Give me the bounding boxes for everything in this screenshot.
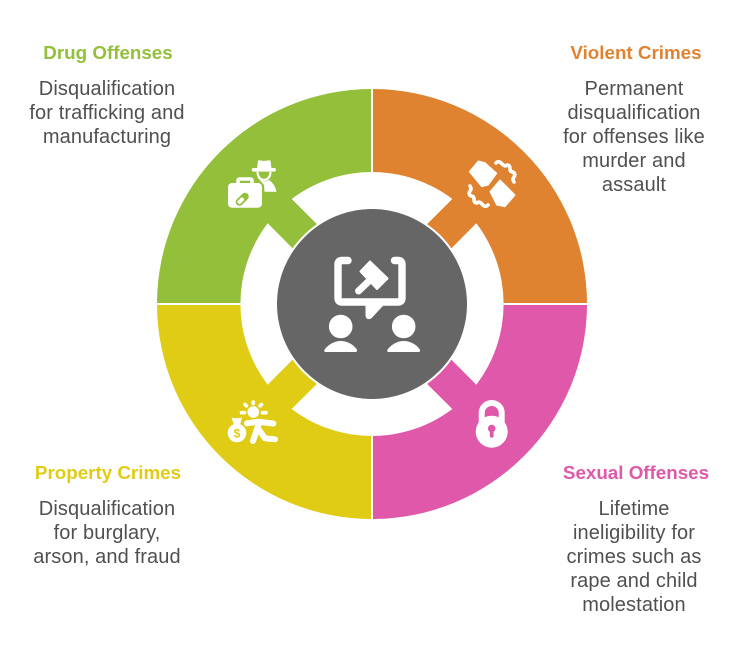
segment: sexual offenses [373,305,587,519]
icon: thief running with money bag [228,402,275,442]
description: sexual offenses: molestation [582,594,686,616]
segment: drug offenses [157,89,371,303]
segment: property crimes [157,305,371,519]
description: drug offenses: Disqualification [39,78,175,100]
icon: thief running with money bag: $ [234,426,241,440]
description: property crimes: arson, and fraud [33,546,181,568]
text block: violent crimes [563,42,705,196]
icon: padlock [476,403,508,448]
description: sexual offenses: rape and child [570,570,698,592]
inner white ring cut-outs [240,172,504,436]
description: property crimes: Disqualification [39,498,175,520]
segment: violent crimes [373,89,587,303]
description: property crimes: for burglary, [54,522,160,544]
heading: drug offenses: Drug Offenses [43,42,173,63]
icon: broken handcuffs [469,161,515,207]
description: violent crimes: Permanent [585,78,684,100]
description: sexual offenses: ineligibility for [573,522,695,544]
text block: property crimes [33,462,181,568]
description: sexual offenses: Lifetime [598,498,670,520]
heading: violent crimes: Violent Crimes [570,42,702,63]
description: violent crimes: assault [602,174,666,196]
icon: gavel, speech bubble and two people [324,260,420,352]
description: violent crimes: murder and [582,150,686,172]
description: violent crimes: for offenses like [563,126,705,148]
text block: drug offenses [29,42,185,148]
center circle [277,209,467,399]
wheel diagram [157,89,587,519]
description: violent crimes: disqualification [567,102,701,124]
heading: property crimes: Property Crimes [35,462,181,483]
description: sexual offenses: crimes such as [566,546,702,568]
description: drug offenses: for trafficking and [29,102,185,124]
heading: sexual offenses: Sexual Offenses [563,462,709,483]
text block: sexual offenses [563,462,709,616]
icon: suitcase with pill and man in hat [228,160,276,208]
description: drug offenses: manufacturing [43,126,171,148]
